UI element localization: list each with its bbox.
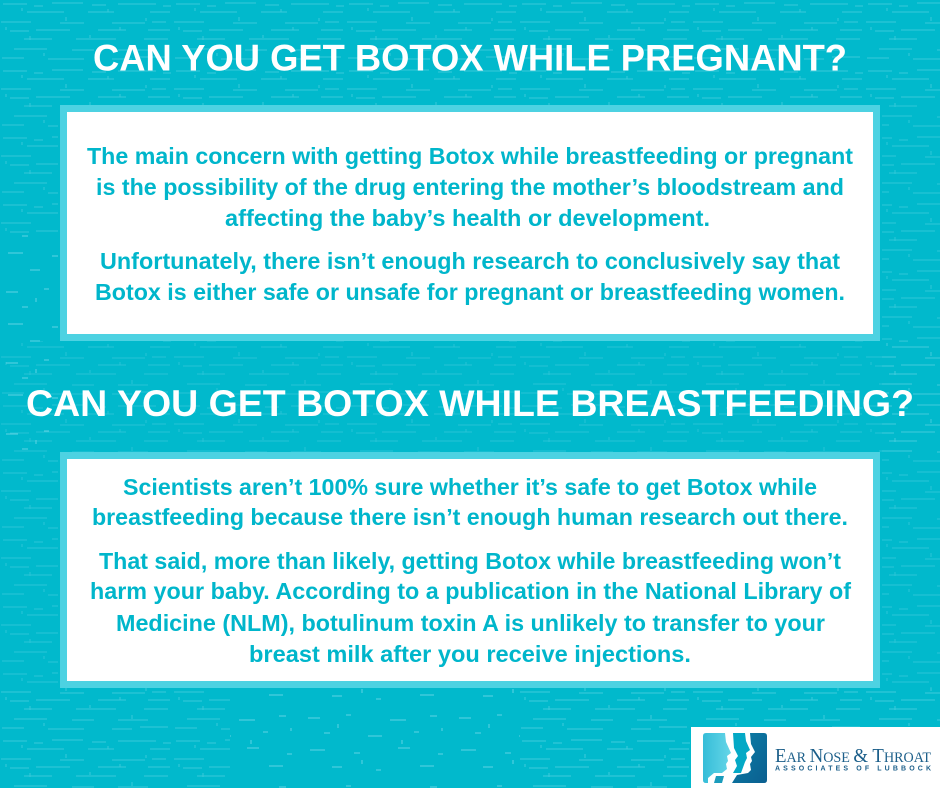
icon: three face profiles bbox=[703, 733, 767, 783]
text block: unlikely to harm: That said, more than likely, getting Botox while breastfeeding won’t bbox=[99, 548, 841, 574]
text block: scientists unsure: breastfeeding because there isn’t enough human research out there. bbox=[92, 504, 848, 530]
text block: unlikely to harm: breast milk after you receive injections. bbox=[249, 641, 691, 667]
text block: main concern: is the possibility of the drug entering the mother’s bloodstream and bbox=[96, 174, 844, 200]
panel: breastfeeding answer bbox=[64, 456, 876, 684]
text block: main concern: The main concern with getting Botox while breastfeeding or pregnant bbox=[87, 143, 853, 169]
title: can you get botox while breastfeeding: CAN YOU GET BOTOX WHILE BREASTFEEDING? bbox=[26, 383, 914, 424]
logo wordmark: EAR NOSE & THROAT bbox=[775, 745, 931, 767]
text block: unlikely to harm: harm your baby. According to a publication in the National Library of bbox=[90, 578, 851, 604]
logo: ear nose and throat associates of lubbock bbox=[691, 727, 940, 788]
text block: scientists unsure bbox=[92, 474, 848, 530]
text block: main concern: affecting the baby’s health or development. bbox=[225, 205, 710, 231]
text block: unlikely to harm bbox=[90, 548, 851, 667]
text block: not enough research bbox=[95, 248, 845, 305]
logo wordmark: ASSOCIATES OF LUBBOCK bbox=[775, 766, 931, 772]
text block: not enough research: Unfortunately, there isn’t enough research to conclusively say that bbox=[100, 248, 840, 274]
text block: scientists unsure: Scientists aren’t 100% sure whether it’s safe to get Botox while bbox=[123, 474, 817, 500]
text block: not enough research: Botox is either safe or unsafe for pregnant or breastfeeding women. bbox=[95, 279, 845, 305]
panel: pregnancy answer bbox=[64, 108, 876, 338]
text block: unlikely to harm: Medicine (NLM), botulinum toxin A is unlikely to transfer to your bbox=[116, 610, 825, 636]
text block: main concern bbox=[87, 143, 853, 231]
title: can you get botox while pregnant: CAN YOU GET BOTOX WHILE PREGNANT? bbox=[93, 38, 847, 78]
